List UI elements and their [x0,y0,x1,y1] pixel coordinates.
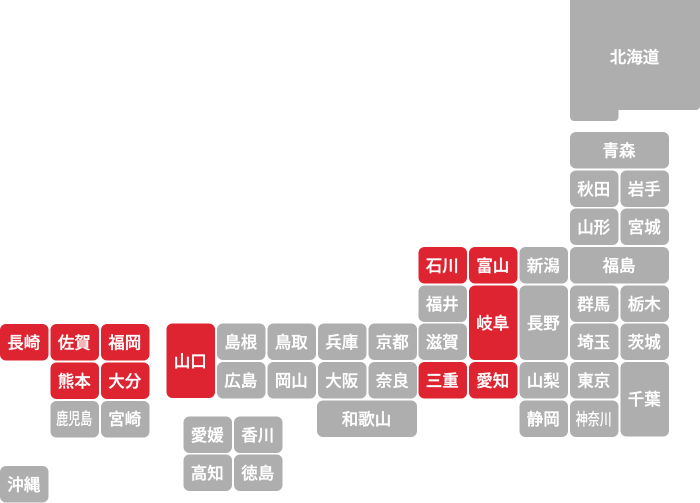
Iwate: 岩手 [628,180,661,199]
Yamanashi [520,362,568,398]
Toyama: 富山 [476,256,509,275]
Yamaguchi: 山口 [174,352,207,371]
Kagoshima [50,401,99,438]
Saitama: 埼玉 [577,333,610,352]
Oita [101,362,150,399]
Chiba [620,362,669,436]
Nagano [520,286,568,360]
Oita: 大分 [108,372,142,391]
Okinawa: 沖縄 [7,475,41,494]
Niigata: 新潟 [527,256,560,275]
Tottori [268,324,316,360]
Okinawa [0,466,48,502]
Aichi [469,362,518,398]
Wakayama [317,400,417,437]
Yamanashi: 山梨 [527,371,560,390]
Iwate [620,170,669,207]
Tokyo [570,362,618,398]
Nara [368,362,417,398]
Shizuoka: 静岡 [527,410,560,429]
Mie: 三重 [426,371,459,390]
Saga: 佐賀 [58,333,91,352]
Akita: 秋田 [577,180,610,199]
Miyagi: 宮城 [628,218,661,237]
Aomori [570,132,669,168]
Kumamoto [50,362,99,399]
Aomori: 青森 [602,141,636,160]
Kanagawa [570,400,618,437]
Tochigi [620,286,669,322]
Wakayama: 和歌山 [342,410,391,429]
Gifu [469,286,518,360]
Fukuoka [101,324,150,360]
Shimane [217,324,266,360]
Hyogo: 兵庫 [325,333,358,352]
Osaka [318,362,366,398]
Tochigi: 栃木 [628,295,661,314]
Gifu: 岐阜 [476,314,509,333]
Kumamoto: 熊本 [58,372,91,391]
Niigata [520,247,568,284]
Hyogo [318,324,366,360]
Kyoto: 京都 [376,333,409,352]
Miyazaki: 宮崎 [108,410,141,429]
Okayama: 岡山 [275,371,308,390]
Fukui [418,286,467,322]
Ehime: 愛媛 [191,426,224,445]
Gunma [570,286,618,322]
Ibaraki [620,324,669,360]
Ibaraki: 茨城 [628,333,661,352]
Kagoshima: 鹿児島 [56,410,92,428]
Okayama [268,362,316,398]
Ehime [184,416,232,453]
Shizuoka [520,400,568,437]
Gunma: 群馬 [577,295,610,314]
Toyama [469,247,518,284]
Yamaguchi [166,324,215,398]
Miyagi [620,208,669,245]
Kagawa: 香川 [241,426,274,445]
Kyoto [368,324,417,360]
Tokushima [234,454,282,491]
Nagasaki: 長崎 [7,333,40,352]
Kochi: 高知 [191,464,224,483]
Hokkaido: 北海道 [610,48,659,67]
Kochi [184,454,232,491]
Tottori: 鳥取 [275,333,308,352]
Mie [418,362,467,398]
Chiba: 千葉 [628,390,661,409]
Osaka: 大阪 [325,371,359,390]
Tokyo: 東京 [577,371,610,390]
Saitama [570,324,618,360]
Hokkaido [570,0,700,121]
Miyazaki [101,401,150,438]
Fukushima [570,247,669,284]
Fukushima: 福島 [602,256,636,275]
Nagasaki [0,324,48,360]
Yamagata [570,208,618,245]
Akita [570,170,618,207]
Hiroshima [217,362,266,398]
Hiroshima: 広島 [224,371,257,390]
Nagano: 長野 [527,314,560,333]
Shiga: 滋賀 [426,333,459,352]
Ishikawa [418,247,467,284]
Saga [50,324,99,360]
Nara: 奈良 [376,371,409,390]
Fukui: 福井 [426,295,459,314]
Kagawa [234,416,282,453]
Kanagawa: 神奈川 [576,410,612,429]
Fukuoka: 福岡 [108,333,141,352]
Yamagata: 山形 [577,218,611,237]
Aichi: 愛知 [476,371,509,390]
Shimane: 島根 [224,333,258,352]
Shiga [418,324,467,360]
Ishikawa: 石川 [426,257,459,275]
Tokushima: 徳島 [241,464,274,483]
